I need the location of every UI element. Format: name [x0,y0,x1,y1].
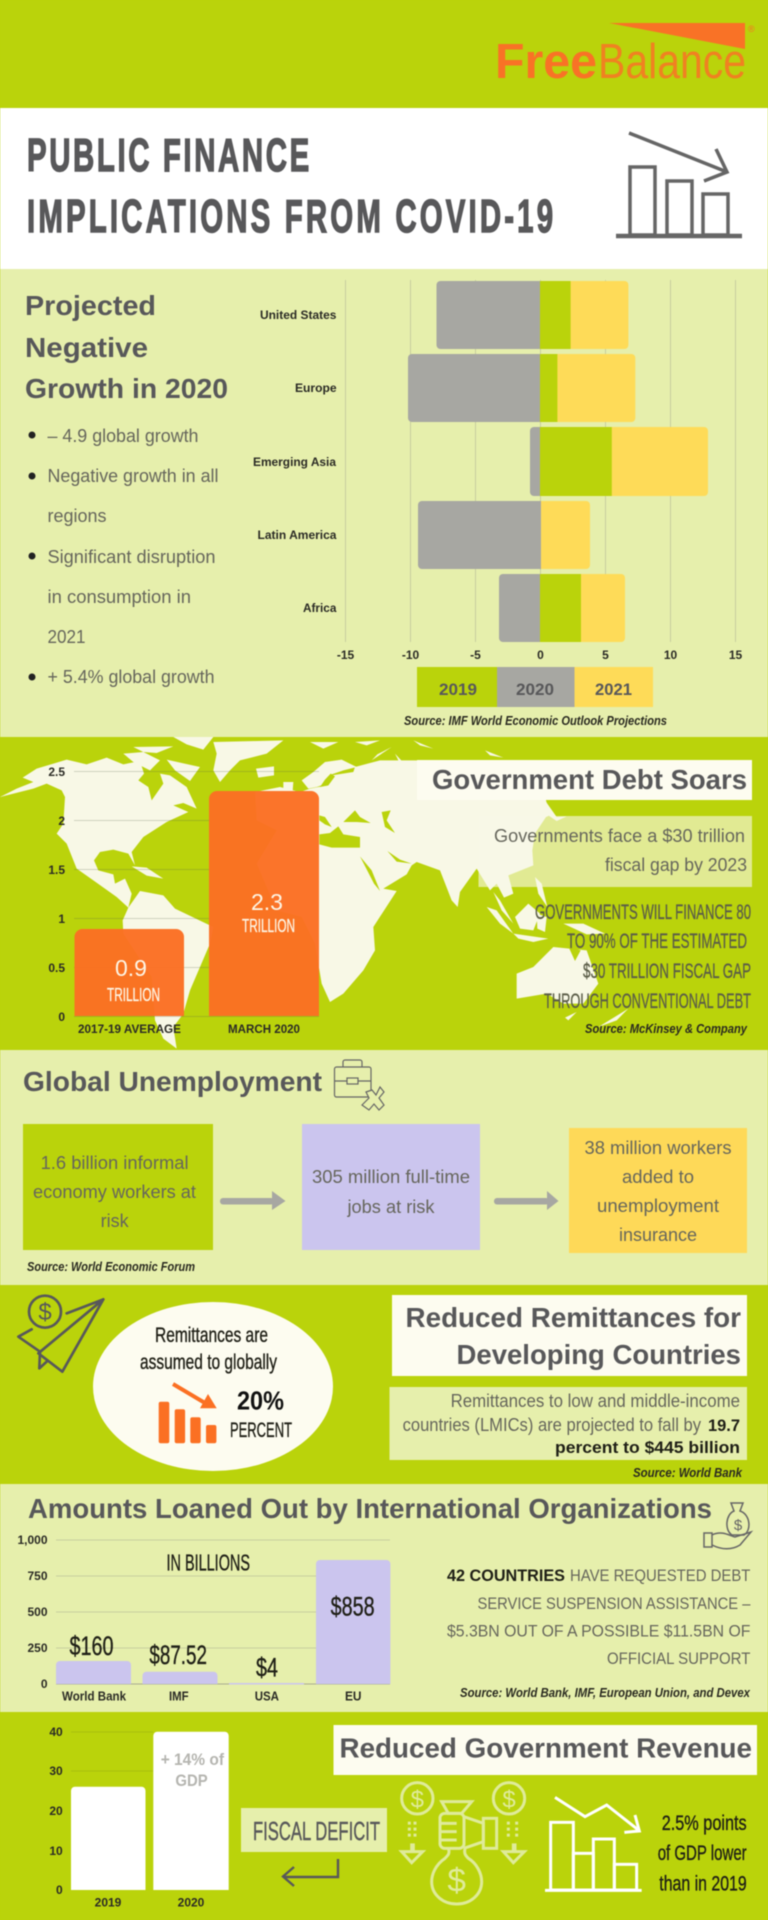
icon: paper plane with dollar [18,1296,103,1372]
axis labels: growth scale [337,648,742,662]
axis labels: organizations: IMF [169,1689,189,1704]
box: full-time jobs at risk: 305 million full-time [312,1167,470,1187]
axis labels: periods: 2017-19 AVERAGE [78,1022,181,1036]
panel: reduced remittances [0,1285,768,1484]
axis labels: organizations: EU [345,1689,362,1704]
axis labels: debt scale: 2.5 [48,765,65,779]
panel: remittances heading: Developing Countries [456,1339,741,1370]
bar: 2020: GDP [175,1771,208,1790]
box: informal economy workers: 1.6 billion informal [41,1153,189,1173]
axis labels: growth scale: 0 [537,648,544,662]
bar: 2017-19 average [74,929,184,1016]
title [27,131,553,243]
icon: hand holding money bag: $ [734,1517,743,1534]
text block: remittances fall: percent to $445 billion [555,1438,740,1457]
axis labels: periods [78,1022,300,1036]
arrow: return to chart [283,1859,338,1886]
source: World Bank: Source: World Bank [633,1465,743,1480]
label: in billions: IN BILLIONS [166,1550,250,1576]
bars: Emerging Asia [530,427,708,496]
axis labels: regions: Latin America [258,528,337,542]
heading: government debt soars: Government Debt Soars [432,764,747,795]
panel: government debt soars [0,737,768,1050]
axis labels: periods: MARCH 2020 [228,1022,300,1036]
axis labels: deficit scale: 20 [49,1804,63,1818]
bar: World Bank [56,1631,131,1684]
bars: Europe [408,354,635,422]
panel: projected negative growth [0,269,768,737]
heading: projected negative growth: Negative [25,332,148,363]
legend: years: 2020 [516,680,554,699]
text block: growth bullets: + 5.4% global growth [48,667,214,687]
panel: logo header [0,0,768,108]
icon: money bag and coins [402,1783,525,1904]
heading: projected negative growth: Growth in 2020 [25,373,228,404]
legend: years: 2019 [439,680,477,699]
axis labels: years [95,1896,205,1910]
icon: money bag and coins: $ [502,1786,516,1813]
text block: debt service suspension: $5.3BN OUT OF A POSSIBLE $11.5BN OF [447,1622,750,1641]
legend: years: 2021 [595,680,632,699]
text block: growth bullets: in consumption in [48,587,191,607]
panel: reduced government revenue [0,1712,768,1920]
callout: remittances circle: PERCENT [230,1419,292,1442]
axis labels: billions scale: 500 [27,1605,48,1619]
bar: 2020: + 14% of [161,1750,224,1769]
logo: FreeBalance: Free [495,35,597,89]
panel: debt heading [417,760,752,800]
text block: growth bullets: – 4.9 global growth [48,426,198,446]
bar: 2017-19 average: 0.9 [115,955,147,981]
box: unemployment insurance: added to [622,1167,694,1187]
axis labels: growth scale: 10 [664,648,677,662]
box: unemployment insurance: 38 million workers [584,1138,732,1158]
axis labels: deficit scale: 30 [49,1764,63,1778]
text block: debt service suspension [447,1566,751,1668]
panel: revenue heading [334,1725,757,1775]
axis labels: deficit scale: 0 [56,1883,63,1897]
source: IMF: Source: IMF World Economic Outlook Projections [404,713,667,728]
bars: Africa [499,574,625,642]
heading: projected negative growth: Projected [25,290,156,321]
text block: growth bullets: 2021 [48,627,86,647]
axis labels: billions scale [17,1533,48,1691]
bar: 2020 [153,1732,229,1890]
callout: fiscal gap: Governments face a $30 trillion [494,826,745,846]
axis labels: deficit scale: 40 [49,1725,63,1739]
callout: fiscal deficit [241,1808,387,1852]
axis labels: billions scale: 750 [27,1569,48,1583]
title: IMPLICATIONS FROM COVID-19 [27,192,553,243]
bar: USA [229,1653,304,1684]
icon: money bag and coins: $ [411,1786,424,1813]
box: full-time jobs at risk: jobs at risk [346,1197,436,1217]
axis labels: debt scale: 1 [58,912,65,926]
callout: fiscal gap: fiscal gap by 2023 [605,855,747,875]
axis labels: regions: United States [260,308,337,322]
axis labels: debt scale [48,765,65,1024]
text block: remittances fall: 19.7 [708,1416,740,1435]
bar: EU: $858 [331,1592,375,1622]
axis labels: debt scale: 2 [58,814,65,828]
text block: debt service suspension: 42 COUNTRIES [447,1566,565,1585]
callout: fiscal deficit: FISCAL DEFICIT [253,1816,380,1846]
bar: World Bank: $160 [70,1631,114,1661]
bar chart: government debt [48,765,319,1036]
map: world [0,737,628,1049]
source: McKinsey: Source: McKinsey & Company [585,1021,748,1036]
text block: remittances fall [390,1387,747,1460]
bars: Latin America [418,501,590,569]
callout: remittances circle [93,1302,333,1471]
axis labels: growth scale: -15 [337,648,354,662]
icon: briefcase with cross [334,1060,384,1110]
bars: United States [436,281,628,349]
icon: paper plane with dollar: $ [38,1299,52,1326]
bar chart: loan amounts [17,1533,390,1704]
axis labels: regions [253,308,337,615]
axis labels: organizations: World Bank [62,1689,127,1704]
arrow: to jobs at risk [220,1191,286,1210]
axis labels: years: 2020 [178,1896,205,1910]
panel: remittances heading [392,1295,747,1376]
text block: remittances fall: countries (LMICs) are projected to fall by [403,1415,701,1435]
bar chart: growth by region [253,280,742,662]
icon: hand holding money bag [704,1503,751,1549]
axis labels: organizations: USA [255,1689,280,1704]
box: full-time jobs at risk [302,1124,480,1250]
box: unemployment insurance: unemployment [597,1196,719,1216]
bar: IMF [142,1640,218,1684]
panel: remittances heading: Reduced Remittances for [406,1302,741,1333]
axis labels: deficit scale: 10 [49,1844,63,1858]
box: unemployment insurance [569,1128,747,1253]
callout: remittances circle: Remittances are [155,1324,268,1347]
icon: orange falling bars [159,1384,217,1443]
box: informal economy workers [23,1124,213,1250]
axis labels: growth scale: 5 [602,648,609,662]
legend: years [417,667,653,707]
heading: projected negative growth [25,290,228,404]
arrow: to unemployment insurance [494,1191,558,1210]
axis labels: growth scale: -5 [470,648,481,662]
axis labels: debt scale: 0 [58,1010,65,1024]
bar: 2017-19 average: TRILLION [107,985,160,1005]
axis labels: growth scale: 15 [729,648,742,662]
bar: USA: $4 [256,1653,278,1683]
axis labels: debt scale: 0.5 [48,961,65,975]
callout: remittances circle: 20% [237,1386,284,1416]
icon: white falling chart [545,1797,642,1890]
axis labels: regions: Emerging Asia [253,455,336,469]
bar chart: fiscal deficit [49,1725,229,1910]
axis labels: regions: Africa [303,601,337,615]
box: unemployment insurance: insurance [619,1225,697,1245]
icon: falling bar chart [616,133,742,236]
title: PUBLIC FINANCE [27,131,309,182]
axis labels: billions scale: 250 [27,1641,48,1655]
axis labels: billions scale: 0 [41,1677,48,1691]
icon: money bag and coins: $ [447,1863,466,1900]
logo: FreeBalance [495,23,755,89]
panel: title [0,108,768,269]
bar: IMF: $87.52 [149,1640,207,1670]
axis labels: regions: Europe [295,381,337,395]
panel: amounts loaned [0,1484,768,1712]
axis labels: billions scale: 1,000 [17,1533,48,1547]
heading: global unemployment: Global Unemployment [23,1066,322,1097]
text block: growth bullets: regions [48,506,106,526]
text block: GDP points [658,1812,747,1896]
bar: March 2020 [209,791,319,1016]
bar: March 2020: TRILLION [242,916,295,936]
callout: fiscal gap [478,816,752,887]
bar: EU [316,1560,390,1684]
axis labels: years: 2019 [95,1896,122,1910]
box: informal economy workers: economy workers at [33,1182,196,1202]
text block: growth bullets: Negative growth in all [48,466,218,486]
heading: amounts loaned: Amounts Loaned Out by International Organizations [28,1493,712,1524]
panel: revenue heading: Reduced Government Revenue [340,1733,752,1764]
text block: growth bullets [28,426,218,687]
axis labels: debt scale: 1.5 [48,863,65,877]
axis labels: deficit scale [49,1725,63,1897]
text block: growth bullets: Significant disruption [48,547,216,567]
axis labels: growth scale: -10 [402,648,419,662]
callout: remittances circle: assumed to globally [140,1351,277,1374]
text block: debt service suspension: OFFICIAL SUPPORT [607,1649,750,1668]
text block: conventional debt [535,901,751,1013]
panel: global unemployment [0,1050,768,1285]
box: informal economy workers: risk [101,1211,130,1231]
bar: 2019 [71,1787,146,1890]
text block: remittances fall: Remittances to low and middle-income [451,1391,740,1411]
axis labels: organizations [62,1689,362,1704]
source: World Economic Forum: Source: World Economic Forum [27,1259,195,1274]
logo: FreeBalance: ® [748,24,755,34]
bar: March 2020: 2.3 [251,889,283,915]
